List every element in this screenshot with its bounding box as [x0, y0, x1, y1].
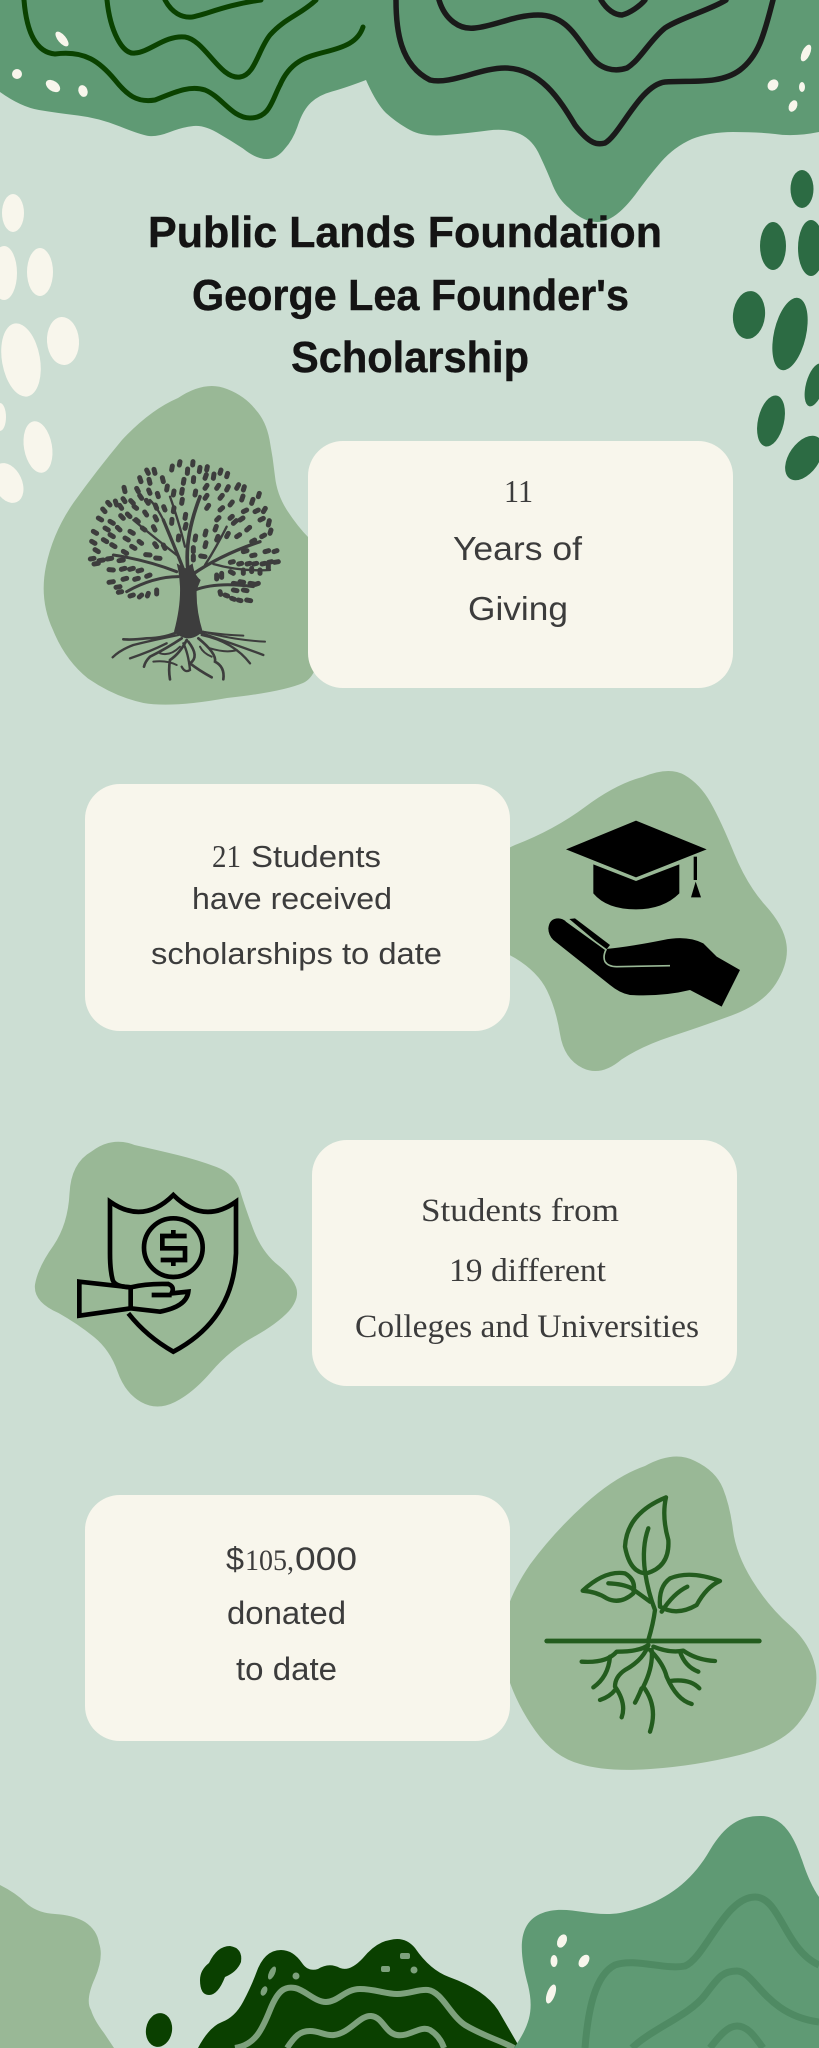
- cream dots left: [0, 194, 81, 508]
- dark green blob with lines: [143, 1939, 520, 2048]
- panel: students: [85, 771, 787, 1071]
- green dots right: [731, 170, 819, 487]
- icon: tree with roots: [90, 462, 278, 679]
- medium green blob with lines: [514, 1816, 819, 2048]
- icon: shield, coin and hand: [79, 1195, 236, 1352]
- card text: Students: [251, 839, 381, 874]
- card: [308, 441, 733, 688]
- bottom decorative blobs: [0, 1816, 819, 2048]
- title: [148, 208, 662, 382]
- card: [312, 1140, 737, 1386]
- card text: Years of: [453, 530, 583, 567]
- dark green wavy lines: [24, 0, 363, 118]
- card: [85, 784, 510, 1031]
- icon: plant with roots: [547, 1497, 759, 1732]
- card text: 19 different: [449, 1253, 606, 1289]
- card text: [453, 473, 583, 627]
- card text: Colleges and Universities: [355, 1309, 699, 1345]
- card text: Students from: [421, 1193, 619, 1229]
- light green blob: [0, 1885, 114, 2048]
- title: Scholarship: [291, 333, 529, 382]
- title: George Lea Founder's: [192, 271, 629, 320]
- icon blob: plant: [504, 1457, 816, 1770]
- icon blob: tree: [44, 386, 322, 705]
- card text: to date: [236, 1651, 337, 1687]
- card text: scholarships to date: [151, 936, 442, 971]
- card text: [151, 838, 442, 971]
- black wavy lines: [396, 0, 773, 144]
- panel: donated: [85, 1457, 816, 1770]
- title: Public Lands Foundation: [148, 208, 662, 257]
- card text: have received: [192, 881, 392, 916]
- top decorative blobs: [0, 0, 819, 222]
- card: [85, 1495, 510, 1741]
- card text: [226, 1541, 357, 1687]
- card text: 105,: [245, 1544, 294, 1577]
- panel: years of giving: [44, 386, 733, 705]
- icon: graduation cap over hand: [548, 821, 740, 1007]
- card text: 11: [504, 473, 533, 509]
- card text: 21: [212, 838, 241, 874]
- panel: colleges: [35, 1140, 737, 1406]
- card text: [355, 1193, 699, 1345]
- icon blob: cap: [480, 771, 787, 1071]
- card text: Giving: [468, 590, 568, 627]
- icon blob: shield: [35, 1142, 297, 1406]
- card text: donated: [227, 1595, 346, 1631]
- white specks: [12, 30, 813, 113]
- card text: 000: [295, 1541, 357, 1577]
- card text: $: [226, 1541, 244, 1577]
